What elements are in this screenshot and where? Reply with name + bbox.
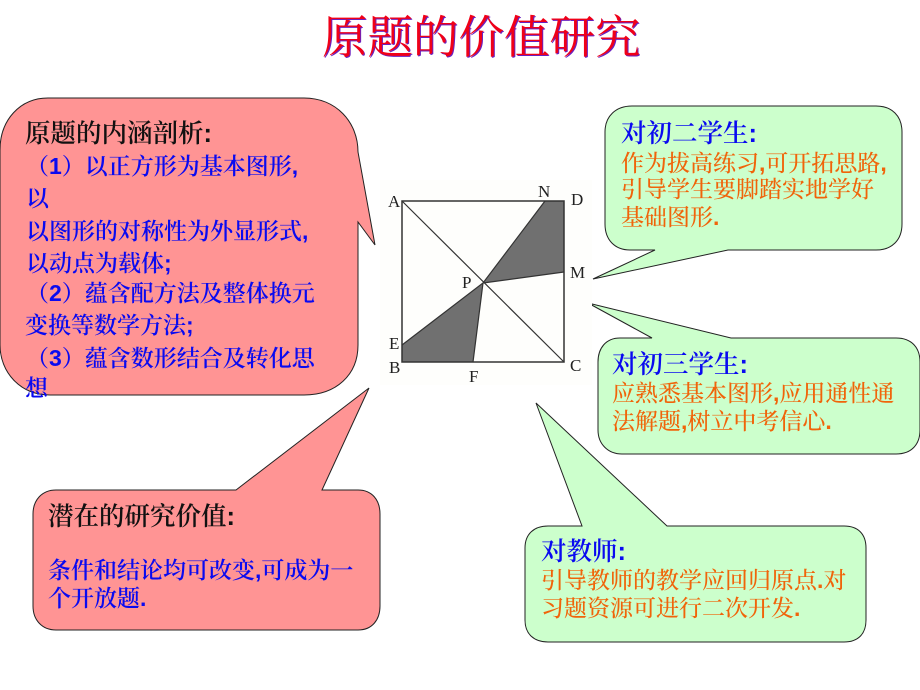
title: 原题的价值研究 [322, 12, 641, 63]
point labels: E [389, 334, 399, 353]
text: 以图形的对称性为外显形式, [26, 218, 308, 244]
text: research value [48, 502, 353, 611]
panel: research value bubble [33, 388, 380, 630]
text: 个开放题. [48, 585, 146, 611]
text: 基础图形. [621, 204, 719, 230]
panel: content analysis bubble [0, 98, 375, 395]
point labels: M [570, 263, 585, 282]
text: 引导教师的教学应回归原点.对 [541, 567, 846, 593]
text: 想 [25, 376, 48, 401]
text: 对初二学生: [621, 119, 757, 148]
chart: geometry square diagram [380, 180, 592, 386]
text: grade two students [621, 119, 887, 230]
text: 原题的内涵剖析: [25, 119, 212, 148]
point labels [388, 182, 585, 386]
text: （2）蕴含配方法及整体换元 [26, 280, 315, 306]
point labels: B [389, 358, 400, 377]
text: content analysis [25, 119, 315, 401]
text: 条件和结论均可改变,可成为一 [48, 557, 353, 583]
point labels: P [462, 273, 471, 292]
point labels: N [538, 182, 550, 201]
panel: teacher bubble [525, 403, 866, 642]
text: 潜在的研究价值: [48, 502, 235, 531]
text: （3）蕴含数形结合及转化思 [26, 345, 315, 371]
point labels: C [570, 356, 581, 375]
panel: grade three bubble [588, 303, 920, 454]
point labels: F [469, 367, 478, 386]
text: 以动点为载体; [26, 250, 172, 276]
text: grade three students [612, 350, 894, 434]
text: 变换等数学方法; [25, 312, 194, 338]
text: 引导学生要脚踏实地学好 [621, 177, 874, 202]
text: 法解题,树立中考信心. [612, 408, 832, 434]
text: 对教师: [541, 537, 626, 566]
point labels: A [388, 192, 401, 211]
text: teachers [541, 537, 846, 621]
text: （1）以正方形为基本图形, [26, 153, 298, 179]
panel: grade two bubble [593, 106, 902, 279]
text: 以 [26, 186, 49, 211]
text: 作为拔高练习,可开拓思路, [621, 150, 887, 176]
shaded region upper right [483, 201, 564, 283]
diagonal and segments [402, 201, 564, 362]
text: 习题资源可进行二次开发. [541, 595, 800, 621]
square outline [402, 201, 564, 362]
shaded region lower left [402, 283, 483, 362]
text: 对初三学生: [612, 350, 748, 379]
text: 应熟悉基本图形,应用通性通 [612, 380, 894, 406]
point labels: D [571, 190, 583, 209]
